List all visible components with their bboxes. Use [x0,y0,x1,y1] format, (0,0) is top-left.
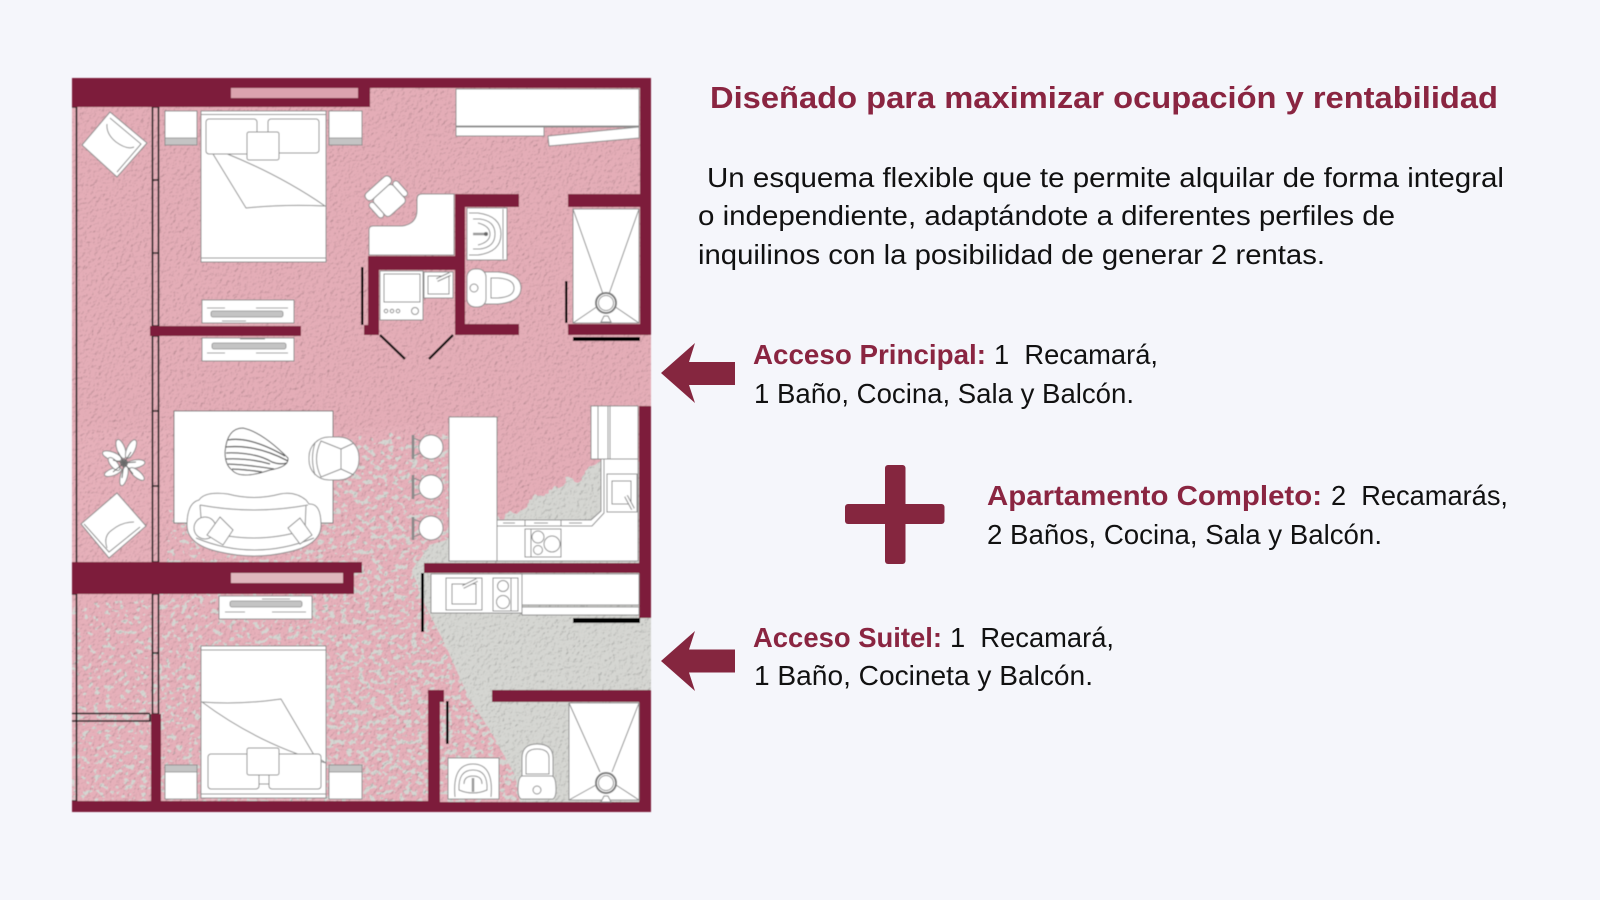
armchair [309,437,359,480]
suite bed [201,646,326,798]
bar and stools [413,417,497,561]
intro paragraph: o independiente, adaptándote a diferentes perfiles de [698,200,1395,231]
wardrobe [456,89,639,146]
sofa [187,493,321,556]
rug [174,411,333,523]
top kitchenette [380,271,453,320]
arrow: acceso principal [661,343,735,403]
walls [72,78,651,812]
master bed [201,111,326,262]
arrow: acceso suite [661,631,735,691]
text: apartamento completo [987,480,1508,550]
intro paragraph [698,162,1504,270]
title: Diseñado para maximizar ocupación y rentabilidad [710,80,1498,115]
main kitchen [497,406,638,561]
text: acceso suite [753,622,1114,691]
text: apartamento completo: 2 Recamarás, [1331,480,1508,511]
intro paragraph: Un esquema flexible que te permite alquilar de forma integral [707,162,1504,193]
text: acceso suite: 1 Baño, Cocineta y Balcón. [754,660,1093,691]
balcony lines and windows [72,107,158,801]
icon: balcony chair top [82,112,147,177]
intro paragraph: inquilinos con la posibilidad de generar 2 rentas. [698,239,1325,270]
suite bathroom fixtures [448,703,639,802]
floor texture [72,87,652,803]
dressers [202,300,294,361]
text: acceso principal [753,339,1158,409]
shower top [573,209,639,323]
text: acceso principal: Acceso Principal: [753,339,986,370]
text: apartamento completo: Apartamento Completo: [987,480,1322,511]
icon: balcony chair bottom [81,493,146,558]
text: acceso suite: Acceso Suitel: [753,622,942,653]
icon: plant [101,438,146,487]
text: acceso principal: 1 Baño, Cocina, Sala y Balcón. [754,378,1134,409]
text: acceso suite: 1 Recamará, [950,622,1114,653]
suite dresser [219,596,312,619]
text: acceso principal: 1 Recamará, [994,339,1158,370]
icon: plus [845,465,944,564]
text: apartamento completo: 2 Baños, Cocina, Sala y Balcón. [987,519,1382,550]
floor plan [71,77,652,813]
pouf [225,428,288,475]
nightstands top [165,111,362,145]
top bathroom fixtures [467,208,521,307]
nightstands bottom [165,765,362,799]
desk and chair [361,172,454,255]
lower kitchenette [431,574,639,615]
